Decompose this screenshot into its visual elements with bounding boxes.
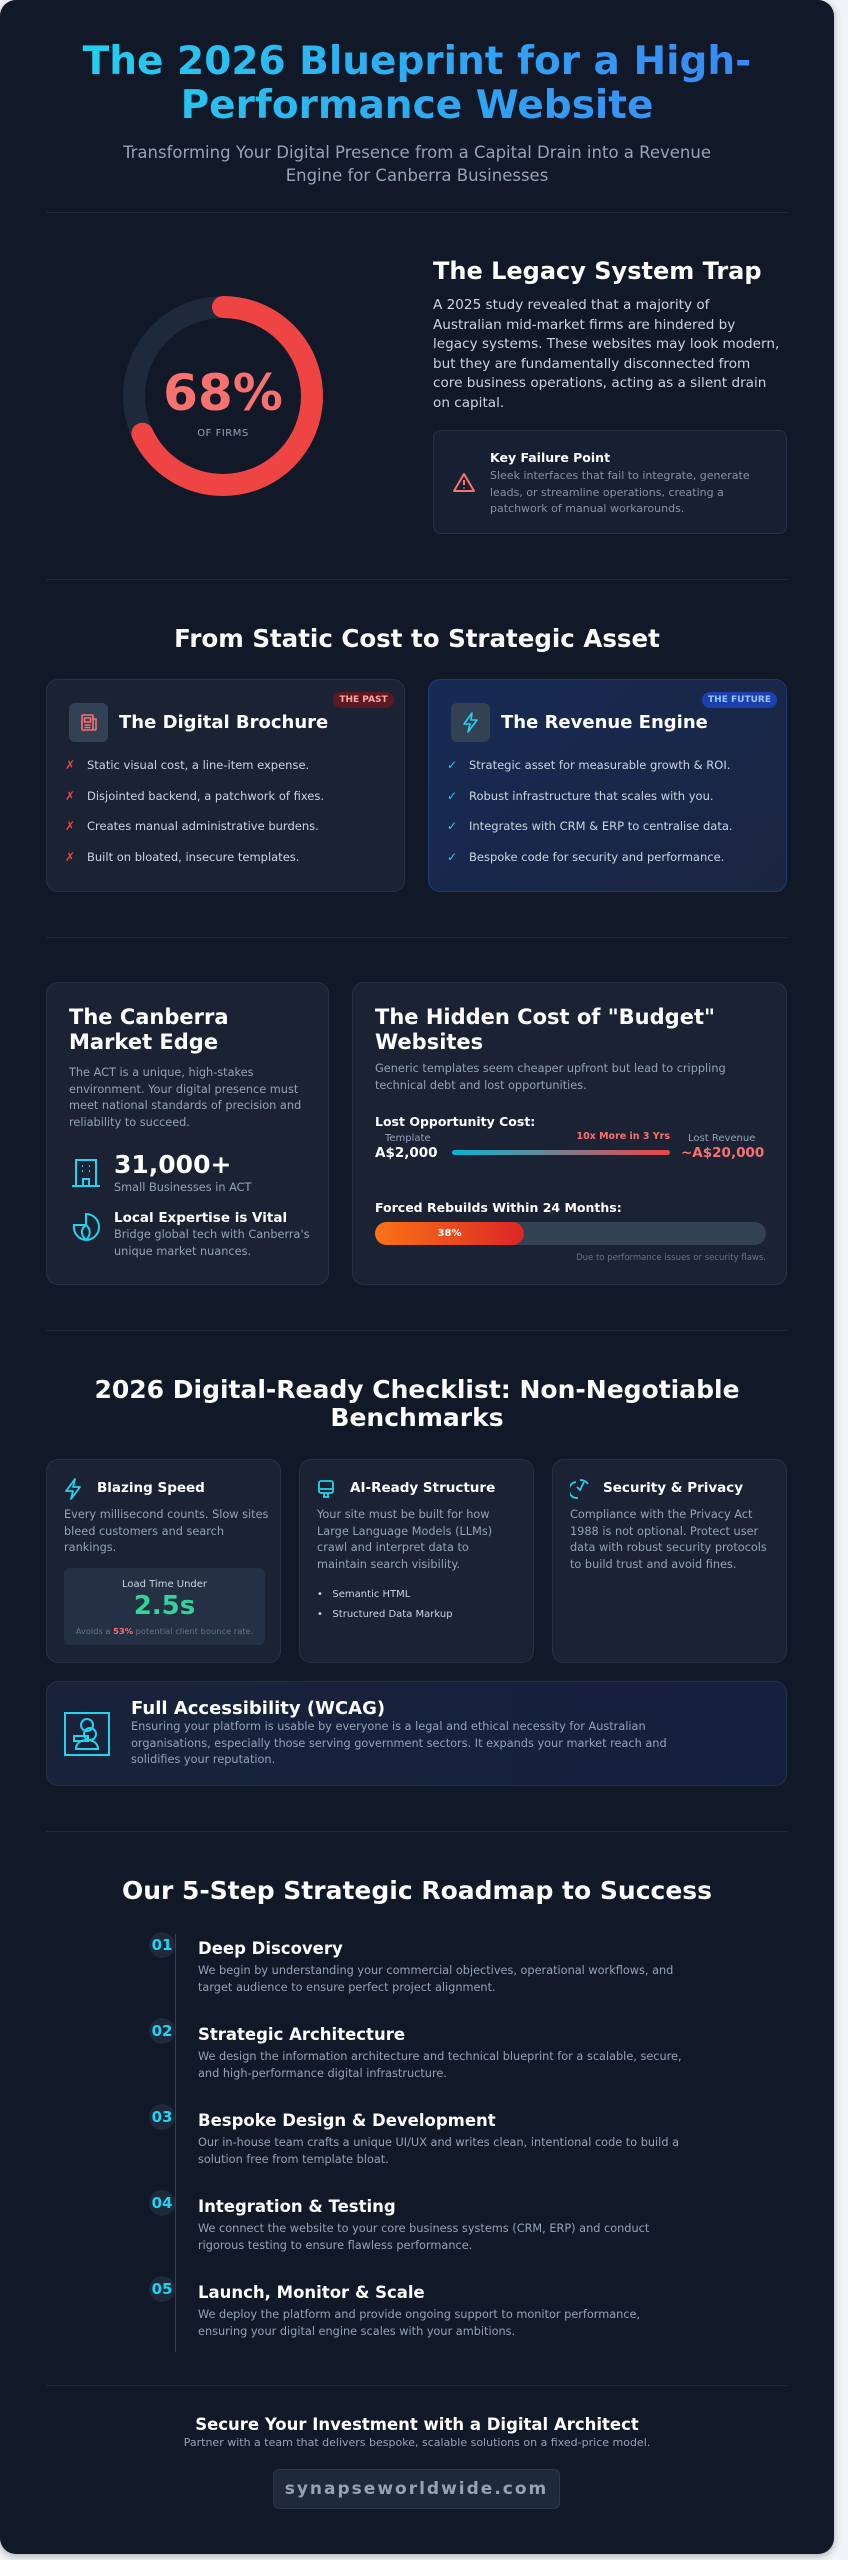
chart: forced rebuilds bar: 38% (438, 1228, 461, 1239)
panel: the past: Built on bloated, insecure templates. (87, 850, 299, 864)
icon: accessibility (64, 1712, 110, 1756)
title: Performance Website (181, 83, 653, 128)
chart: lost opportunity bar (375, 1131, 764, 1161)
chart: lost opportunity bar: A$2,000 (375, 1145, 438, 1161)
heading: checklist: 2026 Digital-Ready Checklist: Non-Negotiable (94, 1375, 740, 1404)
panel: the past: THE PAST (339, 695, 388, 705)
chart: lost opportunity bar: Lost Revenue (688, 1133, 755, 1144)
heading: legacy system trap: The Legacy System Trap (433, 257, 762, 285)
panel: ai-ready: AI-Ready Structure (350, 1480, 495, 1496)
chart: lost opportunity bar: Template (385, 1133, 431, 1144)
stat: load time: Avoids a 53% potential client bounce rate. (76, 1626, 253, 1636)
panel: the future: ✓ (447, 758, 457, 772)
heading: roadmap: Our 5-Step Strategic Roadmap to Success (122, 1876, 712, 1905)
icon: bolt (65, 1478, 81, 1500)
legacy paragraph: but they are fundamentally disconnected from (433, 356, 750, 372)
panel: the past: ✗ (65, 789, 75, 803)
heading: checklist (94, 1375, 740, 1432)
panel: hidden cost: Forced Rebuilds Within 24 Months: (375, 1200, 622, 1215)
step 04 (149, 2190, 650, 2252)
callout: key failure point: Key Failure Point (490, 450, 610, 465)
panel: the future: Robust infrastructure that scales with you. (469, 789, 714, 803)
panel: the past: Disjointed backend, a patchwork of fixes. (87, 789, 324, 803)
callout: key failure point (433, 430, 787, 534)
panel: accessibility: Ensuring your platform is usable by everyone is a legal and ethical necessity for Australian organisations, especially those serving government sectors. It expands your market reach and solidifies your reputation. (131, 1720, 667, 1766)
panel: canberra market edge: The Canberra (69, 1005, 229, 1029)
panel: the future: ✓ (447, 789, 457, 803)
subtitle: Transforming Your Digital Presence from a Capital Drain into a Revenue Engine for Canberra Businesses (123, 143, 711, 185)
cta subtitle: Partner with a team that delivers bespoke, scalable solutions on a fixed-price model. (184, 2436, 650, 2449)
panel: accessibility (46, 1681, 787, 1786)
step 02: We design the information architecture and technical blueprint for a scalable, secure, and high-performance digital infrastructure. (198, 2050, 682, 2080)
legacy paragraph (433, 297, 779, 410)
step 01: Deep Discovery (198, 1939, 343, 1958)
panel: canberra market edge: Small Businesses in ACT (114, 1181, 251, 1194)
panel: security: Compliance with the Privacy Act 1988 is not optional. Protect user data with robust security protocols to build trust and avoid fines. (570, 1508, 767, 1571)
legacy paragraph: Australian mid-market firms are hindered by (433, 316, 735, 332)
panel: ai-ready: • Semantic HTML (317, 1589, 410, 1600)
panel: the past: ✗ (65, 850, 75, 864)
panel: canberra market edge: Market Edge (69, 1030, 218, 1054)
step 04: Integration & Testing (198, 2197, 396, 2216)
panel: canberra market edge: Bridge global tech with Canberra's unique market nuances. (114, 1228, 309, 1258)
panel: the future (428, 679, 787, 892)
icon: lightning (451, 703, 490, 742)
legacy paragraph: A 2025 study revealed that a majority of (433, 297, 709, 313)
panel: ai-ready: • Structured Data Markup (317, 1608, 453, 1620)
callout: key failure point: Sleek interfaces that fail to integrate, generate leads, or streamline operations, creating a patchwork of manual workarounds. (490, 469, 750, 515)
panel: the future: Integrates with CRM & ERP to centralise data. (469, 819, 733, 833)
panel: canberra market edge: 31,000+ (114, 1150, 231, 1179)
timeline (149, 1932, 682, 2352)
icon: monitor (318, 1480, 334, 1498)
step 01 (149, 1932, 673, 1994)
step 02 (149, 2018, 682, 2080)
panel: the past (46, 679, 405, 892)
panel: the past: ✗ (65, 758, 75, 772)
step 05: 05 (152, 2280, 172, 2298)
step 03 (149, 2104, 679, 2166)
panel: the past: The Digital Brochure (119, 712, 328, 733)
cta url button: synapseworldwide.com (285, 2479, 548, 2499)
stat: load time: 2.5s (134, 1591, 195, 1621)
panel: the future: Strategic asset for measurable growth & ROI. (469, 758, 730, 772)
step 02: Strategic Architecture (198, 2025, 405, 2044)
panel: ai-ready (299, 1459, 534, 1663)
panel: blazing speed: Every millisecond counts. Slow sites bleed customers and search rankings. (64, 1508, 268, 1554)
title: The 2026 Blueprint for a High- (83, 39, 751, 84)
title (30, 40, 804, 128)
donut chart: OF FIRMS (197, 428, 249, 439)
panel: the future: Bespoke code for security and performance. (469, 850, 724, 864)
step 05: We deploy the platform and provide ongoing support to monitor performance, ensuring your digital engine scales with your ambitions. (198, 2308, 640, 2338)
icon: brochure (69, 703, 108, 742)
panel: the future: The Revenue Engine (501, 712, 708, 733)
cta heading: Secure Your Investment with a Digital Architect (195, 2415, 639, 2434)
cta url button (273, 2469, 560, 2509)
step 01: We begin by understanding your commercial objectives, operational workflows, and target audience to ensure perfect project alignment. (198, 1964, 673, 1994)
panel: hidden cost: The Hidden Cost of "Budget" (375, 1005, 715, 1029)
panel: hidden cost: Due to performance issues or security flaws. (576, 1253, 766, 1263)
panel: the future: ✓ (447, 850, 457, 864)
icon: shield (570, 1479, 589, 1499)
chart: lost opportunity bar: ~A$20,000 (681, 1145, 764, 1161)
panel: canberra market edge: Local Expertise is Vital (114, 1210, 287, 1226)
legacy paragraph: legacy systems. These websites may look modern, (433, 336, 779, 352)
step 05 (149, 2276, 640, 2338)
panel: hidden cost: Lost Opportunity Cost: (375, 1114, 535, 1129)
panel: hidden cost: Websites (375, 1030, 483, 1054)
icon: warning (453, 473, 475, 492)
panel: security (552, 1459, 787, 1663)
icon: building (72, 1159, 100, 1187)
stat: load time (64, 1568, 265, 1645)
panel: canberra market edge: The ACT is a unique, high-stakes environment. Your digital presence must meet national standards of precision and reliability to succeed. (69, 1066, 301, 1129)
chart: lost opportunity bar: 10x More in 3 Yrs (576, 1131, 670, 1142)
step 03: Bespoke Design & Development (198, 2111, 496, 2130)
step 02: 02 (152, 2022, 172, 2040)
panel: blazing speed (46, 1459, 281, 1663)
panel: blazing speed: Blazing Speed (97, 1480, 205, 1496)
panel: ai-ready: Your site must be built for how Large Language Models (LLMs) crawl and interpret data to maintain search visibility. (317, 1508, 492, 1571)
step 01: 01 (152, 1936, 172, 1954)
panel: the past: Static visual cost, a line-item expense. (87, 758, 309, 772)
donut chart: 68% (163, 364, 283, 422)
panel: hidden cost: Generic templates seem cheaper upfront but lead to crippling technical debt and lost opportunities. (375, 1062, 726, 1092)
legacy paragraph: on capital. (433, 394, 504, 410)
panel: accessibility: Full Accessibility (WCAG) (131, 1698, 385, 1719)
step 04: 04 (152, 2194, 172, 2212)
panel: the past: ✗ (65, 819, 75, 833)
panel: security: Security & Privacy (603, 1480, 743, 1496)
panel: hidden cost (352, 982, 787, 1285)
heading: checklist: Benchmarks (330, 1403, 504, 1432)
step 03: Our in-house team crafts a unique UI/UX and writes clean, intentional code to build a solution free from template bloat. (198, 2136, 679, 2166)
panel: the future: ✓ (447, 819, 457, 833)
legacy paragraph: core business operations, acting as a silent drain (433, 375, 766, 391)
panel: the past: Creates manual administrative burdens. (87, 819, 319, 833)
panel: the future: THE FUTURE (708, 695, 771, 705)
donut chart (123, 296, 323, 496)
panel: canberra market edge (46, 982, 329, 1285)
step 05: Launch, Monitor & Scale (198, 2283, 425, 2302)
heading: static to strategic: From Static Cost to Strategic Asset (174, 624, 660, 653)
chart: forced rebuilds bar (375, 1222, 766, 1245)
stat: load time: Load Time Under (122, 1579, 207, 1590)
step 04: We connect the website to your core business systems (CRM, ERP) and conduct rigorous testing to ensure flawless performance. (198, 2222, 649, 2252)
icon: globe (72, 1213, 100, 1241)
step 03: 03 (152, 2108, 172, 2126)
